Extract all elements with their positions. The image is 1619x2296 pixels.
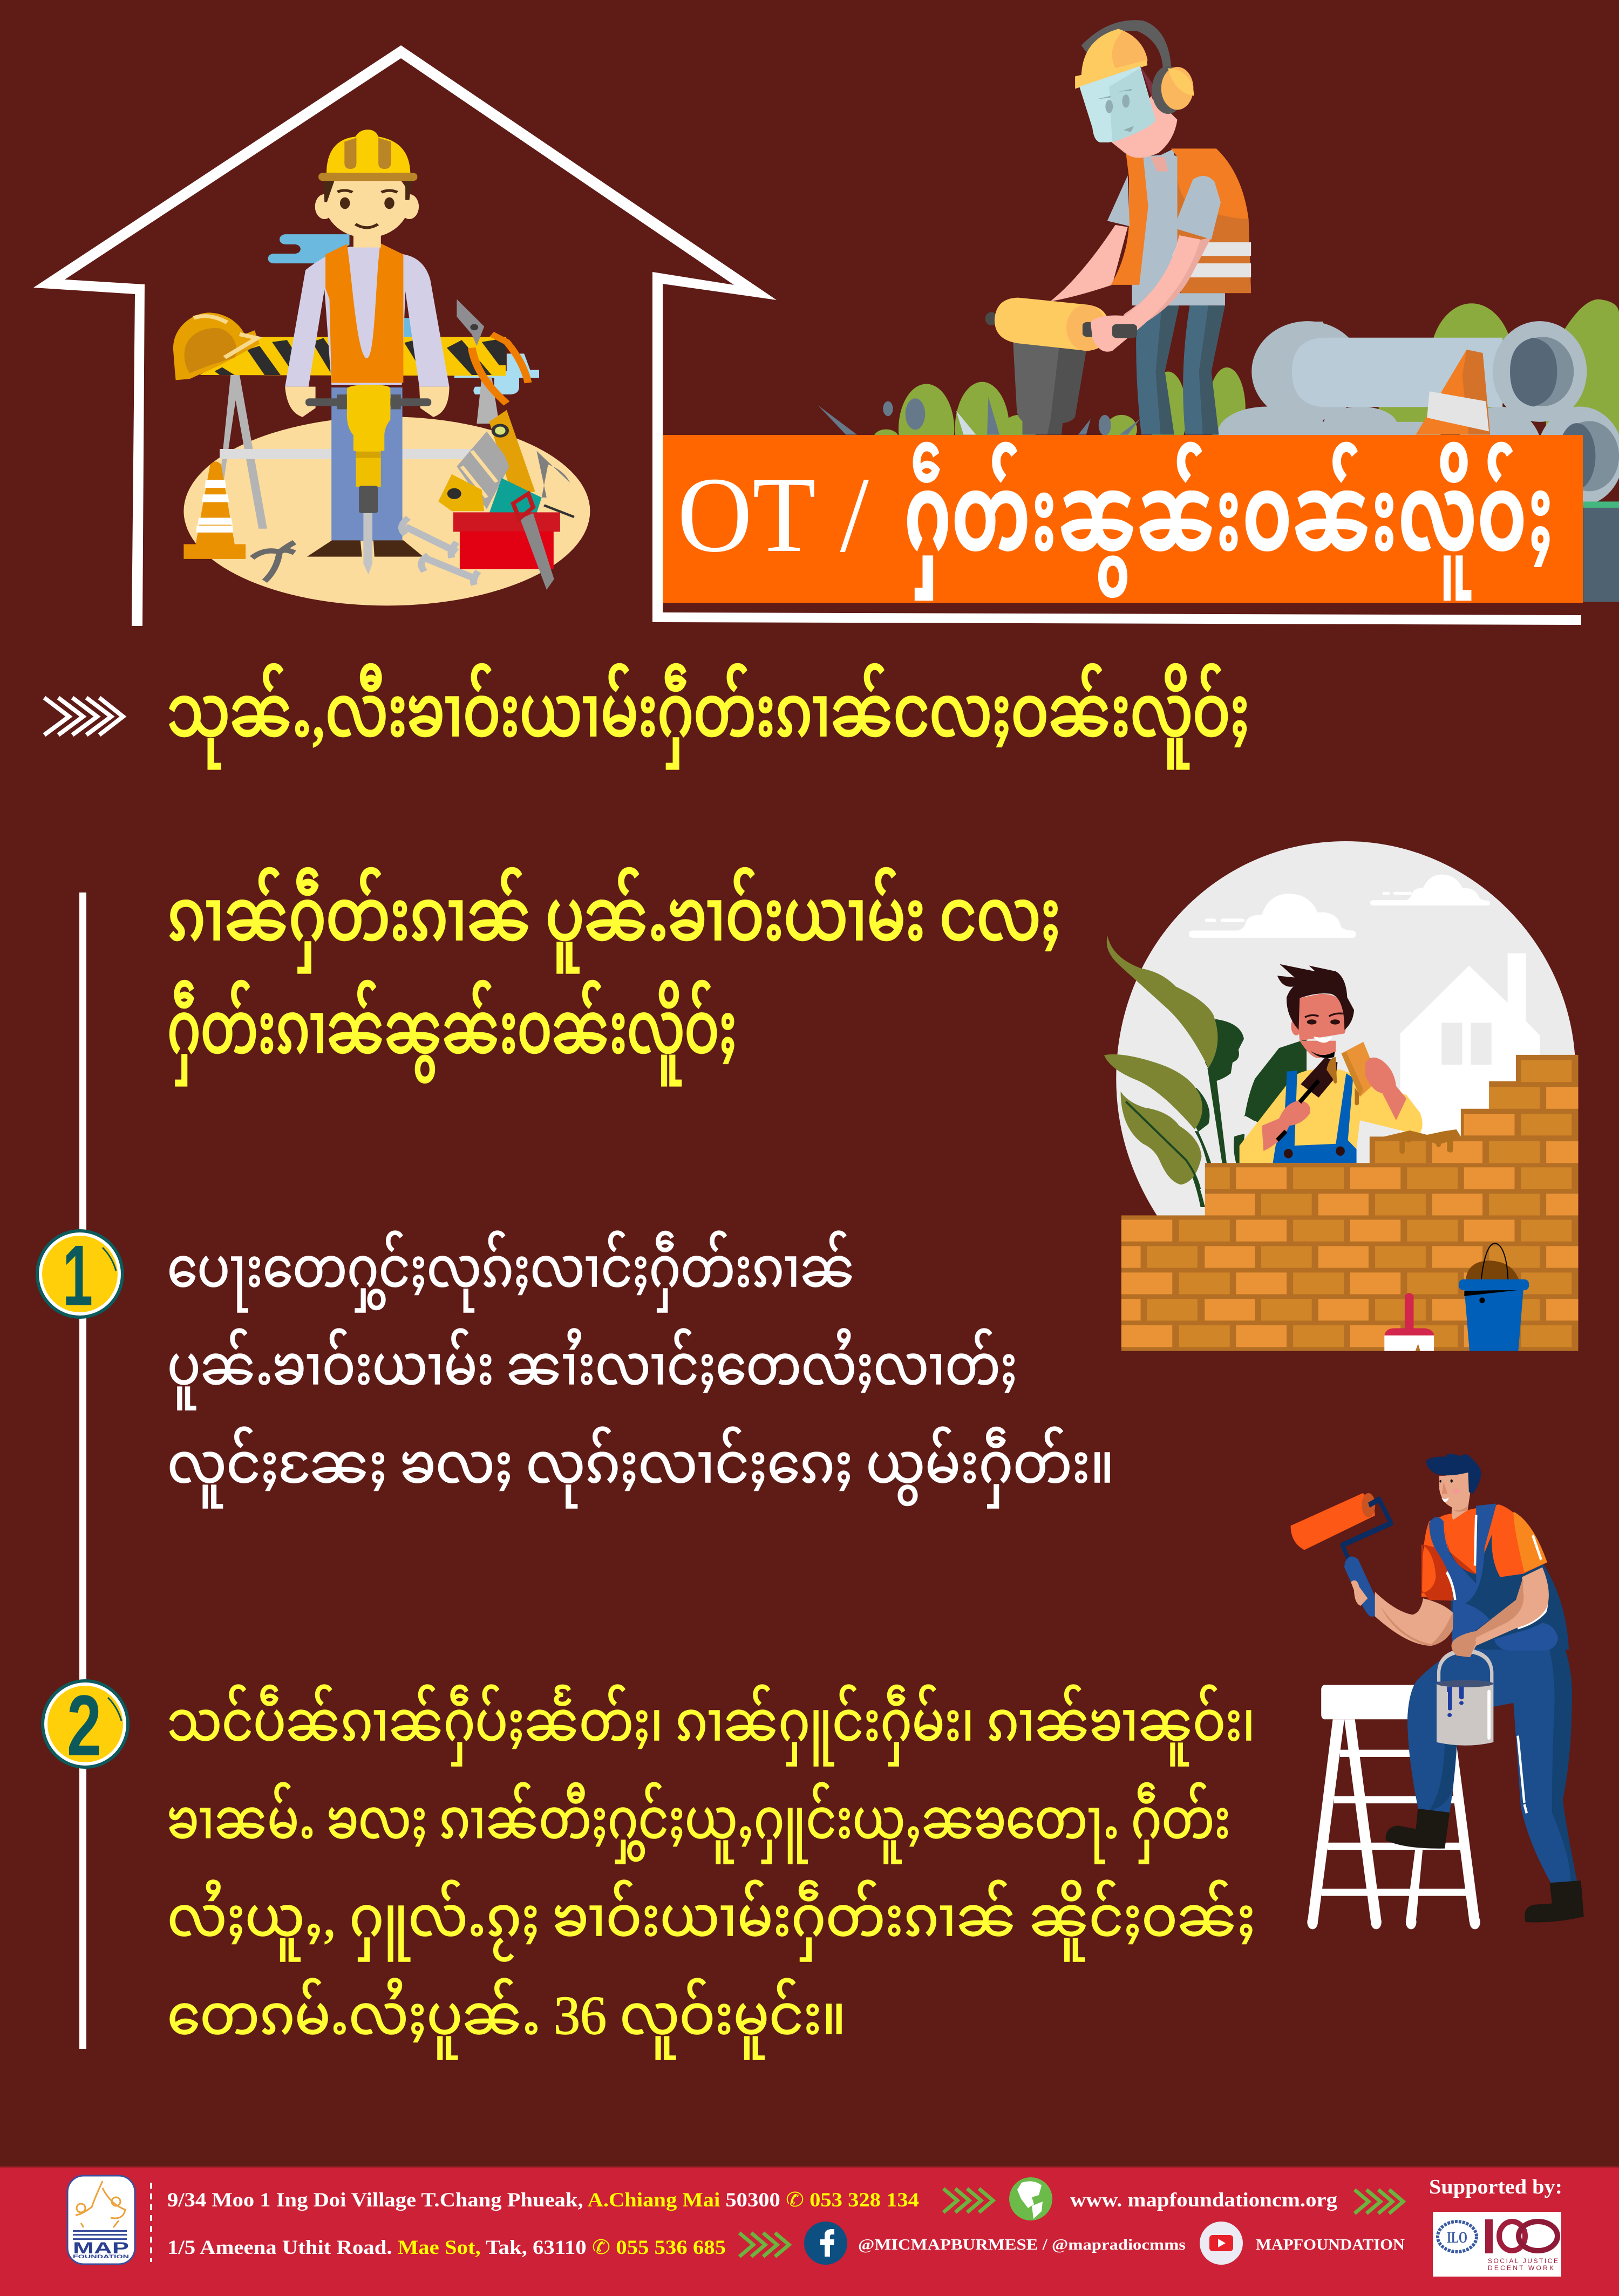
timeline line — [79, 892, 86, 2049]
logo: MAP Foundation: MAP — [73, 2239, 129, 2257]
worker body — [285, 247, 449, 387]
address 1: 9/34 Moo 1 Ing Doi Village T.Chang Phueak, A.Chiang Mai 50300 ✆ 053 328 134 — [167, 2189, 919, 2211]
bricks — [1205, 1163, 1578, 1217]
wrenches — [405, 527, 477, 579]
green chevrons — [739, 2189, 1403, 2257]
badge 1 — [36, 1227, 124, 1324]
point 1 text: ပေႃးတေႁွင်ႈလုၵ်ႈလၢင်ႈႁဵတ်းၵၢၼ် — [167, 1231, 855, 1312]
man — [1244, 1039, 1307, 1128]
cone — [183, 461, 246, 559]
bushes — [874, 299, 1619, 477]
logo: ILO 100: DECENT WORK — [1488, 2264, 1554, 2272]
point 1 text: လူင်ႈၼႄႈ ၶလႈ လုၵ်ႈလၢင်ႈၵေႈ ယွမ်းႁဵတ်း။ — [167, 1427, 1114, 1508]
point 2 text: လႆႈယူႇ, ႁူလ်ႉၵႂႈ ၶၢဝ်းယၢမ်းႁဵတ်းၵၢၼ် ၼိူင်ႈဝၼ်ႈ — [167, 1880, 1255, 1961]
youtube channel: MAPFOUNDATION — [1256, 2236, 1405, 2253]
jackhammer — [1013, 339, 1086, 435]
illustration: worker with jackhammer and pipes — [818, 20, 1619, 602]
sub heading — [167, 868, 1060, 1086]
logo: ILO 100 — [1433, 2212, 1561, 2277]
section heading: သုၼ်ႉ,လီးၶၢဝ်းယၢမ်းႁဵတ်းၵၢၼ်ငလႈဝၼ်းလိူဝ်ႈ — [167, 664, 1249, 769]
head — [353, 235, 381, 248]
legs — [1136, 305, 1179, 435]
badge 1: 1 — [63, 1227, 93, 1324]
sub heading: ႁဵတ်းၵၢၼ်ၼွၼ်းဝၼ်းလိူဝ်ႈ — [167, 980, 737, 1086]
social handles: @MICMAPBURMESE / @mapradiocmms — [858, 2236, 1186, 2253]
footer bar — [0, 2166, 1619, 2296]
icon: facebook — [804, 2222, 847, 2265]
illustration: bricklayer — [1104, 841, 1578, 1351]
website: www. mapfoundationcm.org — [1070, 2189, 1338, 2211]
sub heading: ၵၢၼ်ႁဵတ်းၵၢၼ် ပူၼ်ႉၶၢဝ်းယၢမ်း ငလႈ — [167, 868, 1060, 973]
logo: ILO 100: SOCIAL JUSTICE — [1488, 2257, 1558, 2265]
supported by: Supported by: — [1429, 2176, 1562, 2198]
point 2 text: တေၵမ်ႉလႆႈပူၼ်ႉ 36 လူဝ်းမူင်း။ — [167, 1978, 846, 2060]
point 1 text — [167, 1231, 1114, 1508]
bucket — [1466, 1261, 1519, 1281]
logo: ILO 100: ILO — [1447, 2229, 1467, 2246]
logo: MAP Foundation — [67, 2176, 135, 2264]
plant — [1188, 1068, 1227, 1207]
house — [1400, 953, 1540, 1135]
point 2 text: ၶၢၼမ်ႉ ၶလႈ ၵၢၼ်တီႈႁွင်ႈယူႇႁူင်းယူႇၼၶတေႃႉ ႁဵတ်း — [167, 1782, 1230, 1864]
illustration: painter on ladder — [1291, 1454, 1584, 1929]
icon: youtube — [1200, 2222, 1243, 2265]
boots — [1386, 1809, 1584, 1923]
torso — [1422, 1505, 1569, 1650]
point 2 text — [167, 1685, 1255, 2060]
badge 2: 2 — [67, 1677, 101, 1774]
badge 2 — [41, 1677, 130, 1774]
pants — [1407, 1646, 1577, 1883]
address 2: 1/5 Ameena Uthit Road. Mae Sot, Tak, 63110 ✆ 055 536 685 — [167, 2237, 726, 2259]
point 2 text: သင်ပဵၼ်ၵၢၼ်ႁဵပ်ႈၼႅတ်ႈ၊ ၵၢၼ်ႁူင်းႁဵမ်း၊ ၵၢၼ်ၶၢၼူဝ်း၊ — [167, 1685, 1255, 1766]
orange title banner — [663, 435, 1583, 603]
title text: OT / — [677, 455, 869, 575]
plier + level + saw + box — [457, 299, 484, 346]
illustration: construction worker with tools — [173, 130, 590, 605]
arms — [1375, 1592, 1453, 1646]
pipes — [1217, 407, 1619, 506]
cone — [1416, 350, 1490, 435]
point 1 text: ပူၼ်ႉၶၢဝ်းယၢမ်း ၼၢႆးလၢင်ႈတေလႆႈလၢတ်ႈ — [167, 1328, 1017, 1410]
house outline — [33, 45, 1581, 626]
torso — [1131, 148, 1225, 305]
head — [1109, 95, 1178, 158]
logo: MAP Foundation: FOUNDATION — [73, 2254, 129, 2259]
chevrons marker — [44, 698, 123, 735]
pliers — [252, 542, 295, 581]
brush — [1405, 1293, 1413, 1328]
paint can — [1439, 1651, 1492, 1684]
head — [1452, 1497, 1468, 1520]
icon: globe — [1009, 2177, 1052, 2220]
clouds — [1189, 875, 1490, 938]
